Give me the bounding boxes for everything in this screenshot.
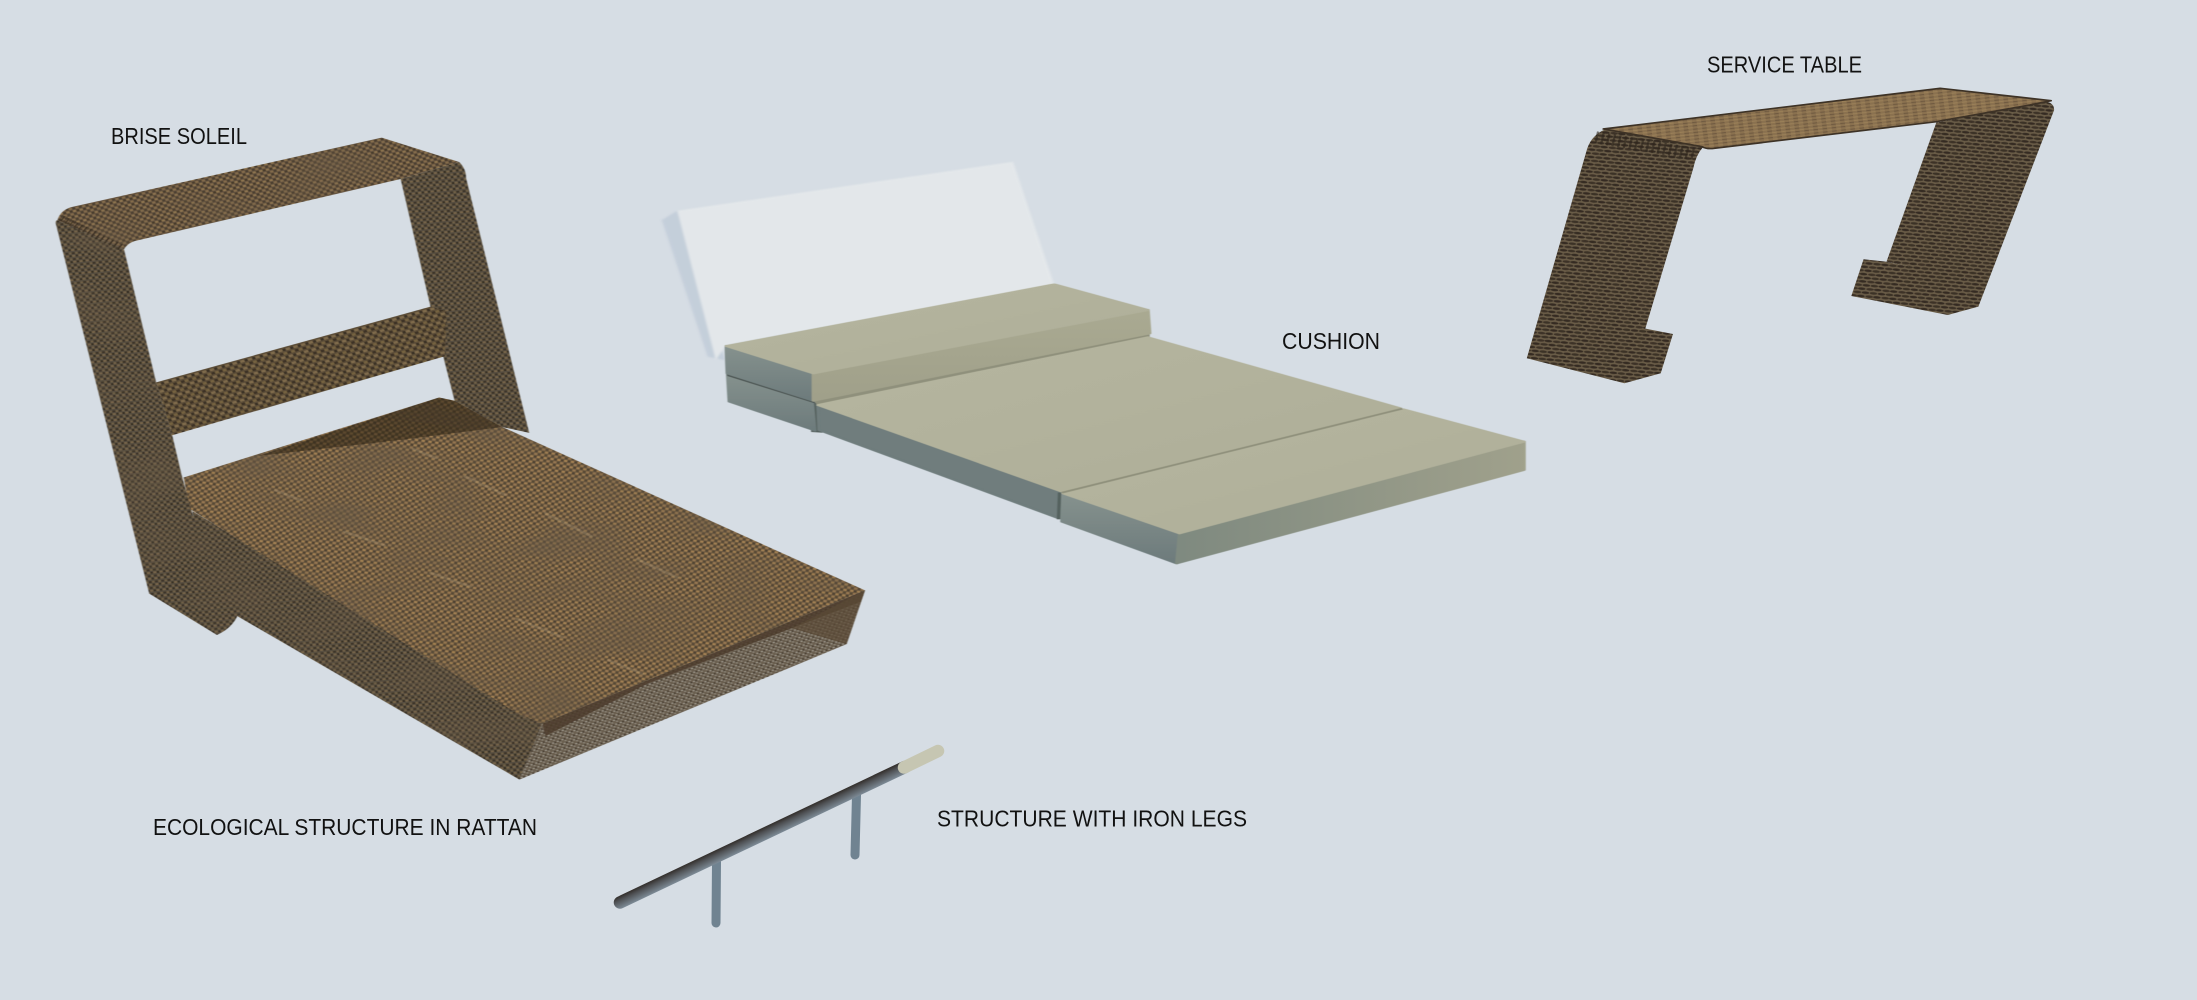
label: service table: SERVICE TABLE	[1707, 52, 1862, 78]
front iron leg	[712, 862, 721, 923]
right back leg	[401, 162, 529, 433]
rear iron leg	[855, 795, 856, 855]
seam shadow	[726, 333, 1150, 405]
beam light end	[904, 751, 938, 768]
foot cushion	[1058, 409, 1524, 563]
seat end face	[519, 590, 865, 780]
iron beam	[620, 767, 905, 902]
label: cushion: CUSHION	[1282, 328, 1380, 354]
upper bolster	[726, 284, 1150, 401]
label: ecological structure in rattan: ECOLOGICAL STRUCTURE IN RATTAN	[153, 814, 537, 840]
label: structure with iron legs: STRUCTURE WITH IRON LEGS	[937, 806, 1247, 832]
top bar	[57, 138, 459, 249]
main cushion	[818, 337, 1401, 518]
lower left cushion	[727, 373, 815, 431]
gap filler between lower cushions	[810, 402, 823, 433]
rattan chair frame	[56, 138, 865, 780]
left leg	[1527, 129, 1703, 383]
right foot	[1851, 259, 1965, 315]
left back leg	[56, 220, 238, 635]
seat side face	[192, 511, 542, 780]
left foot fold	[1624, 328, 1673, 383]
seat top	[184, 398, 865, 724]
ghost backrest	[662, 162, 1054, 360]
service table	[1527, 88, 2054, 383]
table top	[1603, 88, 2051, 149]
right leg	[1887, 102, 2054, 315]
cushion set	[662, 162, 1524, 563]
label: brise soleil: BRISE SOLEIL	[111, 123, 247, 149]
back crossbar	[156, 307, 447, 435]
iron leg structure	[620, 751, 938, 923]
